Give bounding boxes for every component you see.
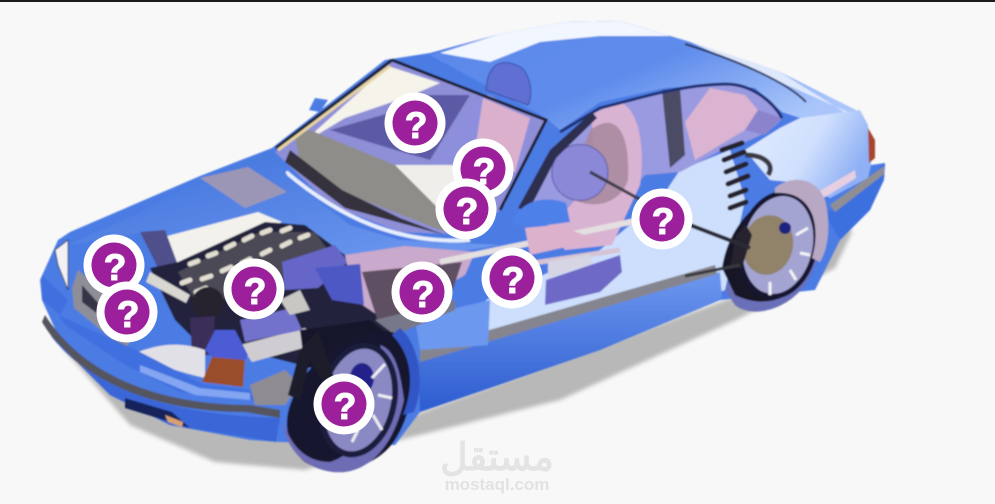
side mirror far: [309, 98, 328, 112]
transmission: [345, 246, 475, 320]
rear door panel: [486, 150, 745, 360]
steering circle: [552, 144, 608, 200]
watermark: مستقل: [440, 437, 554, 479]
rear quarter panel: [745, 110, 871, 198]
left fender: [42, 275, 68, 315]
top border line: [0, 0, 995, 2]
front bumper and grille: [42, 240, 300, 442]
engine block lower: [240, 328, 325, 362]
a pillar: [518, 112, 597, 212]
bumper upper: [58, 315, 255, 400]
headrest: [486, 63, 531, 105]
engine: [146, 222, 475, 370]
hood grey panel: [200, 167, 287, 208]
rear deck highlight: [690, 42, 865, 125]
marker: engine: [224, 258, 284, 320]
marker: headlight: ?: [104, 247, 126, 288]
trunk spoiler line: [685, 44, 806, 102]
door lower panel: [545, 255, 622, 305]
rear bumper: [825, 163, 885, 240]
grille: [72, 270, 132, 350]
bumper highlight: [140, 365, 250, 400]
fan bar: [146, 272, 190, 303]
marker: transmission: ?: [412, 274, 434, 315]
marker: upper windshield: [384, 92, 446, 154]
brake disc: [737, 210, 799, 280]
rear bumper strip: [818, 170, 856, 200]
rocker and lower door: [418, 272, 722, 412]
marker: driveshaft: ?: [502, 260, 524, 301]
rear wheel: [685, 143, 828, 312]
radiator pulley: [192, 287, 224, 319]
suspension front: [288, 330, 340, 400]
seat cushion: [395, 165, 470, 220]
wheel hub: [350, 363, 374, 393]
marker: upper windshield: ?: [405, 105, 427, 146]
marker: engine: ?: [244, 271, 266, 312]
marker: driveshaft: [482, 248, 542, 308]
front seat: [548, 102, 642, 250]
rear suspension spring: [722, 143, 748, 208]
side windows: [486, 63, 782, 250]
driver seat: [430, 95, 532, 205]
marker: grille: ?: [117, 294, 139, 335]
indicator: [202, 357, 245, 387]
roof panel: [430, 21, 860, 130]
front wheel: [283, 328, 420, 472]
cowl highlight: [286, 172, 470, 241]
marker: transmission: [392, 262, 452, 322]
windshield top sky: [300, 66, 440, 145]
marker: front wheel: [314, 374, 374, 434]
watermark: mostaql.com: [445, 475, 549, 494]
valve cover: [178, 232, 335, 300]
marker: rear axle: ?: [652, 201, 674, 242]
intake manifold: [282, 245, 348, 290]
ground shadow: [60, 225, 852, 470]
marker: grille: [96, 282, 158, 342]
headlight right: [138, 345, 205, 378]
rear window frame: [560, 84, 782, 132]
white engine cover: [160, 212, 282, 265]
windshield group: [275, 60, 546, 241]
tail light: [868, 128, 875, 163]
windshield frame: [276, 60, 546, 210]
engine bay dark: [150, 222, 410, 370]
driveshaft: [440, 172, 650, 305]
rear seat: [685, 88, 758, 160]
roof highlight: [440, 21, 670, 62]
bumper strip: [42, 315, 280, 418]
car illustration: [40, 21, 885, 472]
hood: [68, 150, 500, 272]
dashboard: [295, 130, 470, 235]
marker: seat: ?: [473, 151, 495, 192]
marker: dashboard: [436, 178, 496, 240]
marker: front wheel: ?: [334, 386, 356, 427]
rear arch: [775, 180, 828, 262]
marker: rear axle: [632, 188, 692, 250]
marker: dashboard: ?: [456, 191, 478, 232]
wheel arch front: [315, 264, 364, 305]
dark interior band: [330, 95, 470, 160]
marker: headlight: [84, 234, 144, 296]
windshield pillar trim: [278, 66, 390, 150]
bumper lower: [50, 335, 280, 442]
headlight left: [55, 240, 68, 290]
car body: [40, 21, 885, 445]
b pillar: [662, 88, 685, 168]
suspension area: [250, 370, 300, 405]
door mirror: [512, 199, 570, 228]
marker: seat: [452, 138, 514, 200]
